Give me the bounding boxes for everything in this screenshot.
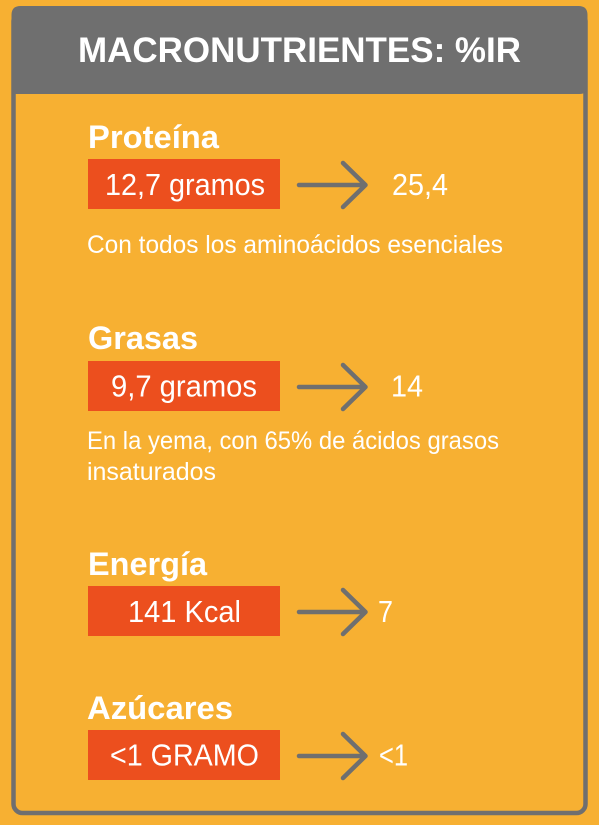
arrow (299, 163, 366, 207)
amount box: 12,7 gramos: 12,7 gramos (105, 168, 265, 202)
note (87, 427, 499, 486)
value: 7: 7 (378, 595, 393, 629)
arrow (299, 365, 366, 409)
note: En la yema, con 65% de ácidos grasos (87, 427, 499, 455)
note: Con todos los aminoácidos esenciales (87, 231, 503, 259)
amount box: <1 GRAMO: <1 GRAMO (110, 738, 259, 772)
value: 14: 14 (391, 370, 423, 404)
heading: Proteína: Proteína (88, 119, 219, 155)
section: Azúcares (87, 690, 408, 780)
amount box: 9,7 gramos (88, 361, 280, 411)
note: insaturados (87, 458, 216, 486)
title: MACRONUTRIENTES: %IR (78, 31, 521, 70)
value: 25,4: 25,4 (392, 168, 448, 202)
header band (12, 6, 588, 94)
amount box: 141 Kcal (88, 586, 280, 636)
amount box: 9,7 gramos: 9,7 gramos (111, 370, 257, 404)
section: Grasas (87, 320, 499, 486)
heading: Grasas: Grasas (88, 320, 198, 356)
section: Proteína (87, 119, 503, 259)
amount box: 12,7 gramos (88, 159, 280, 209)
section: Energía (88, 546, 393, 636)
amount box: 141 Kcal: 141 Kcal (128, 595, 241, 629)
amount box: <1 GRAMO (88, 730, 280, 780)
value: <1: <1 (379, 738, 408, 772)
heading: Energía: Energía (88, 546, 207, 582)
arrow (299, 590, 366, 634)
heading: Azúcares: Azúcares (87, 690, 233, 726)
arrow (299, 734, 366, 778)
